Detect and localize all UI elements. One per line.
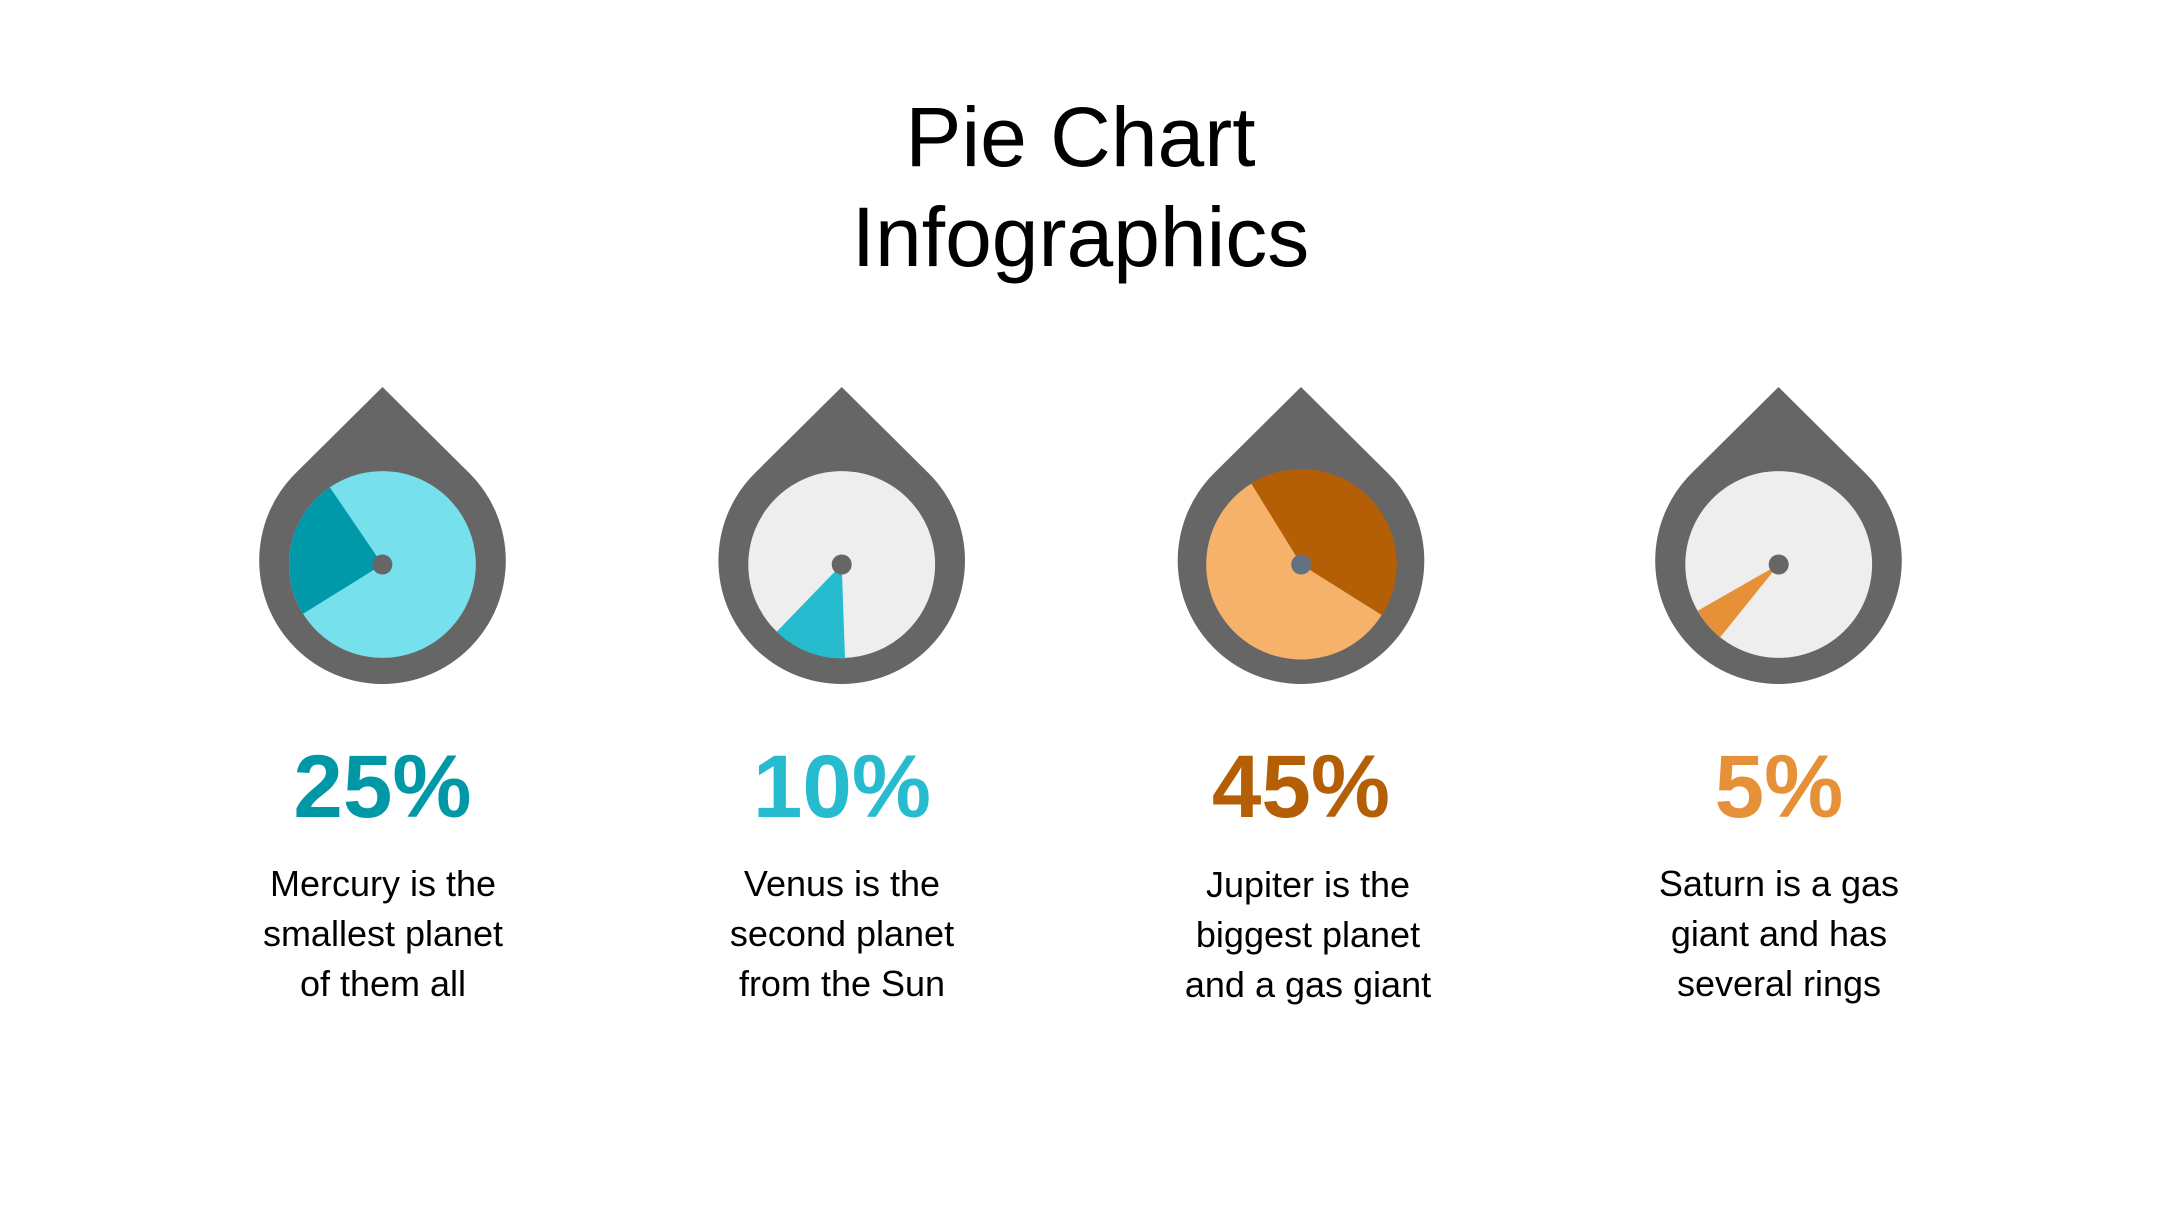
panel: Jupiter 45% bbox=[1178, 387, 1431, 1005]
panel: Mercury 25% bbox=[259, 387, 506, 1004]
icon: Saturn drop pie chart bbox=[1655, 387, 1902, 684]
text: Jupiter description: biggest planet bbox=[1196, 914, 1420, 955]
percentage: 25%: 25% bbox=[293, 736, 472, 836]
icon: Venus drop pie chart bbox=[718, 387, 965, 684]
text: Mercury description: Mercury is the bbox=[270, 863, 496, 904]
text: Venus description: second planet bbox=[730, 913, 954, 954]
text: Venus description: Venus is the bbox=[744, 863, 940, 904]
title: Infographics bbox=[852, 190, 1309, 284]
text: Saturn description: several rings bbox=[1677, 963, 1881, 1004]
percentage: 10%: 10% bbox=[753, 736, 931, 836]
text: Jupiter description bbox=[1185, 864, 1431, 1005]
text: Venus description: from the Sun bbox=[739, 963, 945, 1004]
percentage: 5%: 5% bbox=[1715, 736, 1843, 836]
text: Venus description bbox=[730, 863, 954, 1004]
text: Jupiter description: Jupiter is the bbox=[1206, 864, 1410, 905]
title bbox=[852, 90, 1309, 284]
percentage: 45%: 45% bbox=[1212, 736, 1390, 836]
title: Pie Chart bbox=[905, 90, 1256, 184]
text: Saturn description: giant and has bbox=[1671, 913, 1887, 954]
text: Mercury description: smallest planet bbox=[263, 913, 503, 954]
text: Mercury description bbox=[263, 863, 503, 1004]
panel: Saturn 5% bbox=[1655, 387, 1902, 1004]
text: Saturn description bbox=[1659, 863, 1899, 1004]
icon: Jupiter drop pie chart bbox=[1178, 387, 1424, 684]
text: Mercury description: of them all bbox=[300, 963, 466, 1004]
panel: Venus 10% bbox=[718, 387, 965, 1004]
icon: Mercury drop pie chart bbox=[259, 387, 506, 684]
text: Saturn description: Saturn is a gas bbox=[1659, 863, 1899, 904]
text: Jupiter description: and a gas giant bbox=[1185, 964, 1431, 1005]
